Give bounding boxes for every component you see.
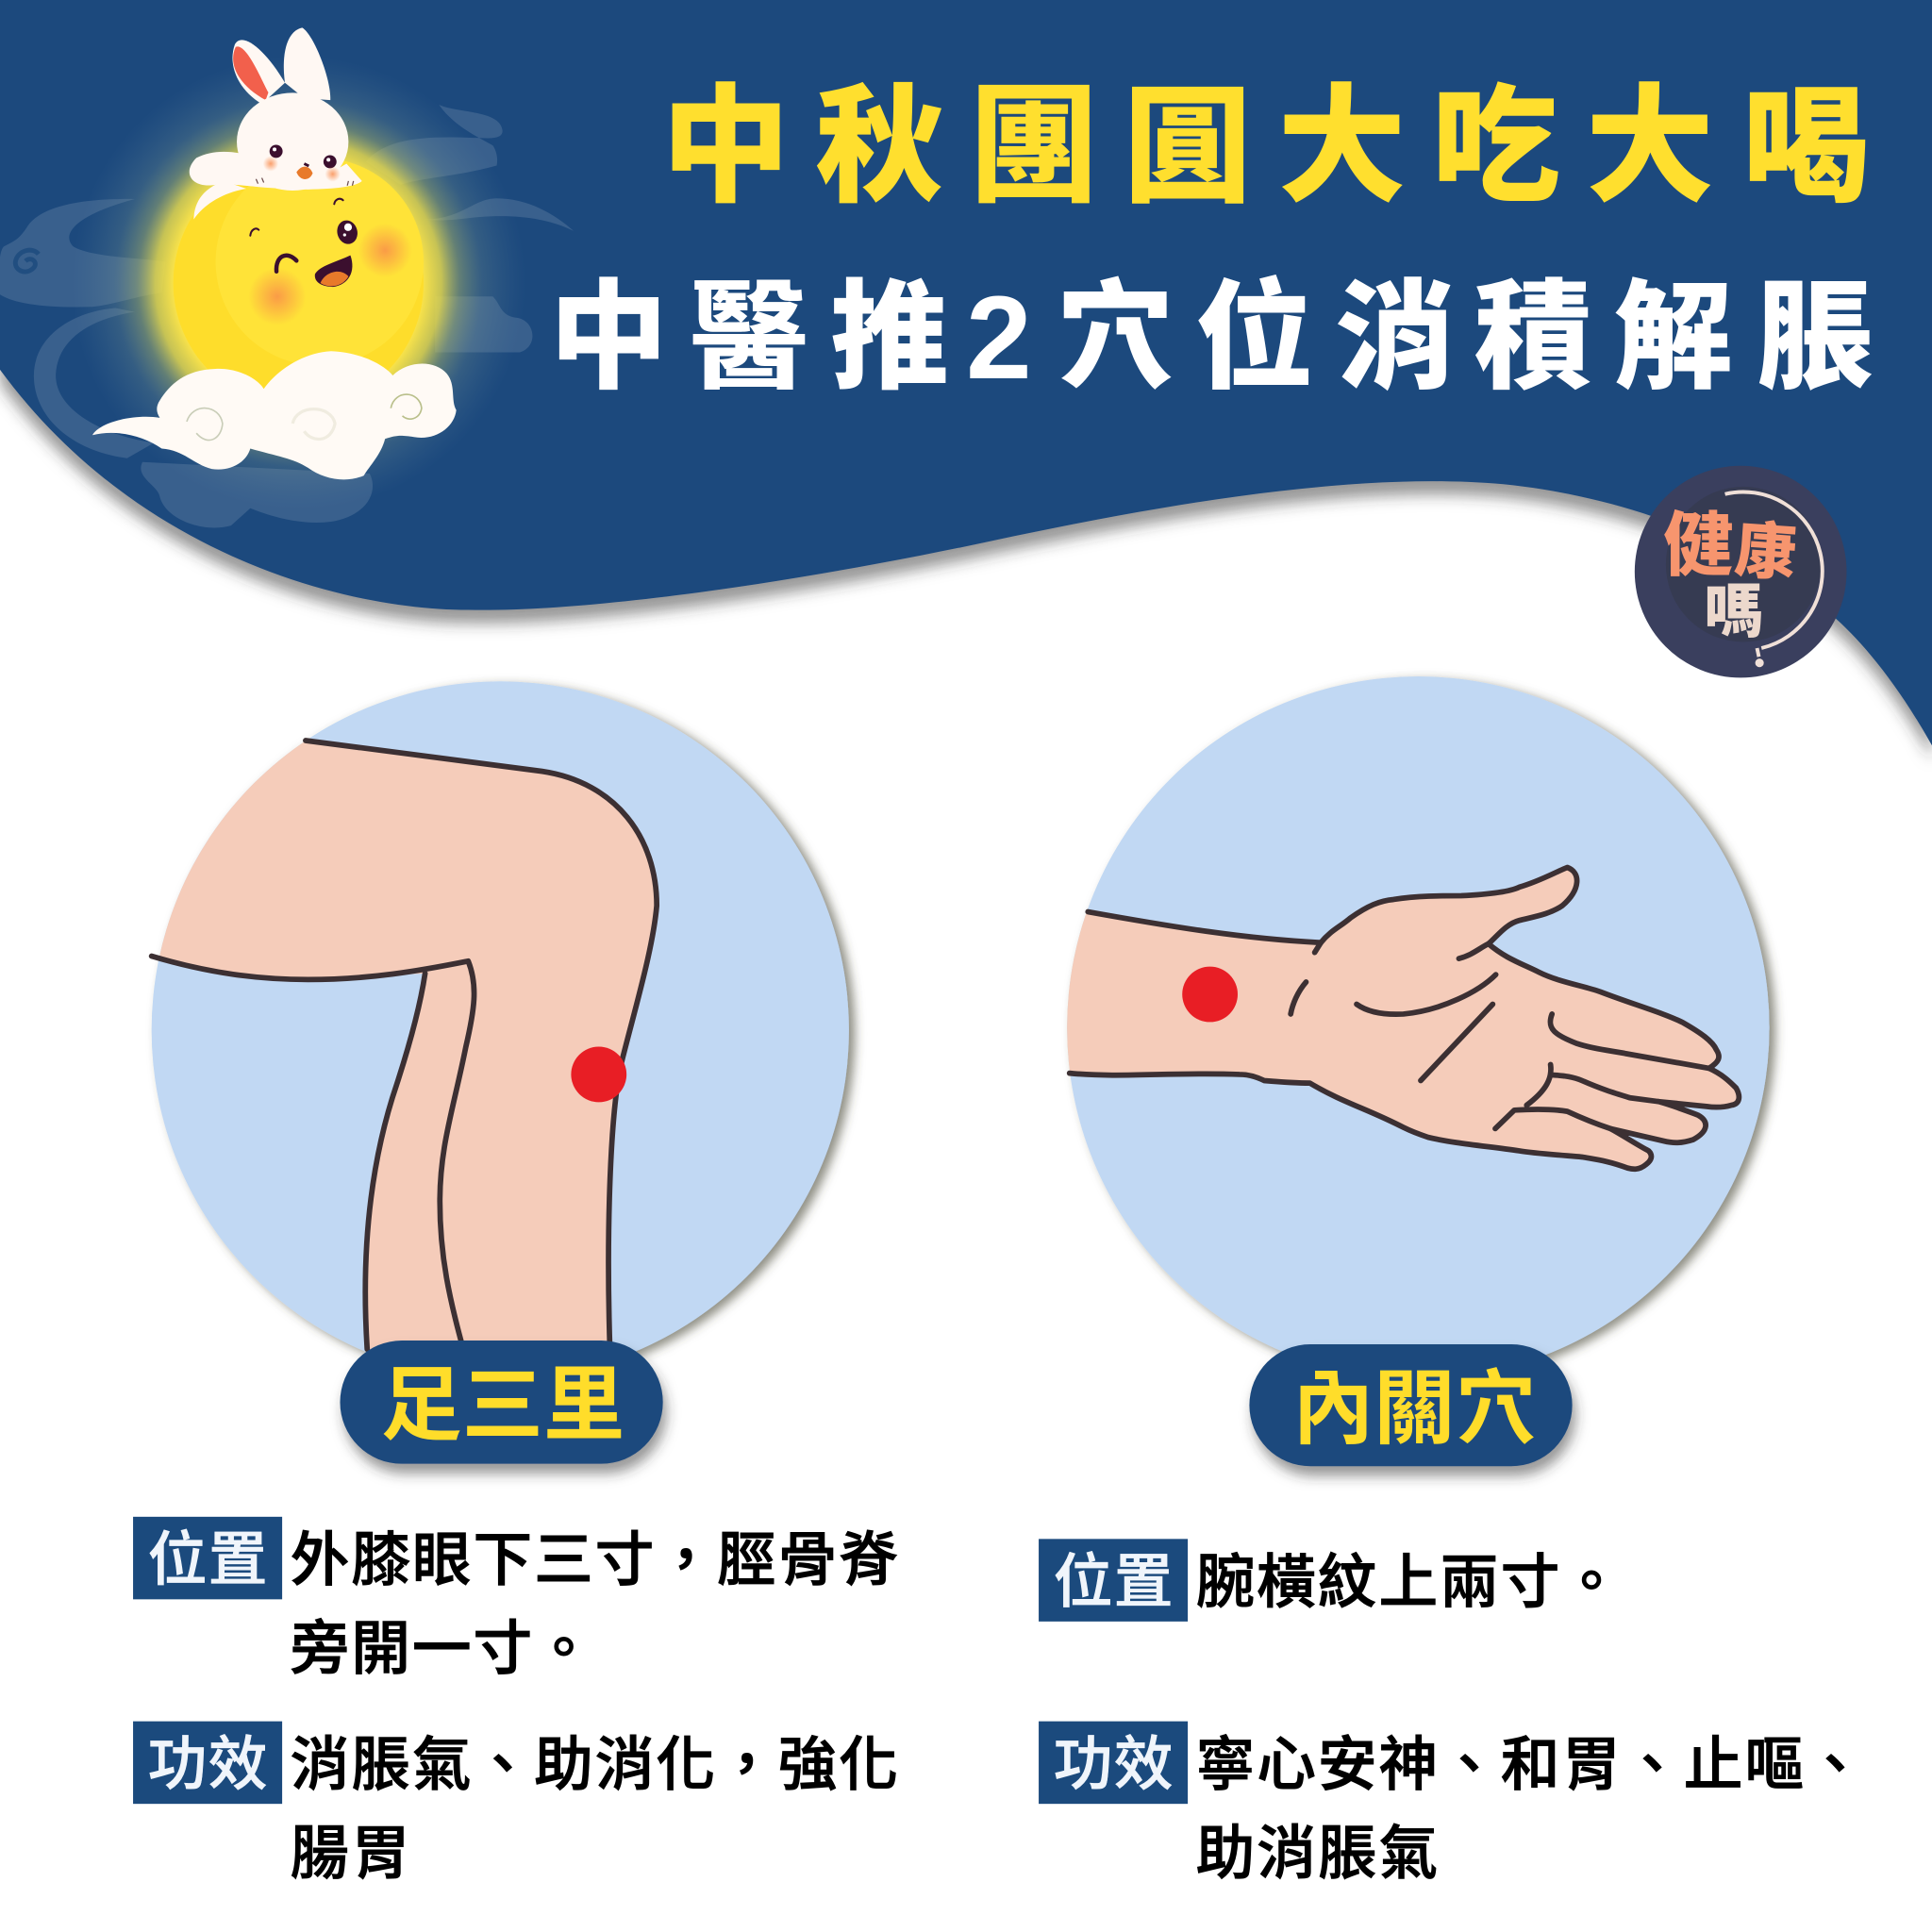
panel: 足三里 <box>124 681 900 1887</box>
blue circle <box>1067 676 1770 1379</box>
hand illustration <box>1059 868 1739 1169</box>
panel: 內關穴 <box>1039 676 1867 1887</box>
badge: 健康嗎 logo <box>1635 466 1846 677</box>
white cloud <box>92 351 457 479</box>
location <box>133 1517 900 1682</box>
effects: 功效 <box>148 1731 269 1797</box>
location: 腕橫紋上兩寸。 <box>1196 1550 1623 1616</box>
location: 外膝眼下三寸，脛骨脊 <box>291 1527 900 1593</box>
name pill <box>1249 1344 1573 1466</box>
leg illustration <box>124 740 657 1349</box>
acupoint dot <box>1182 967 1238 1022</box>
decorative mist clouds <box>0 105 574 527</box>
effects <box>133 1722 900 1887</box>
name pill <box>340 1341 663 1464</box>
location: 位置 <box>148 1526 269 1592</box>
illustration: moon with rabbit on cloud <box>0 27 574 527</box>
banner background <box>0 0 1932 745</box>
name pill: 足三里 <box>381 1360 625 1451</box>
name pill: 內關穴 <box>1292 1364 1537 1455</box>
badge: 健康嗎 logo: 康 <box>1732 515 1799 589</box>
acupoint dot <box>571 1047 626 1102</box>
badge: 健康嗎 logo: 嗎 <box>1704 579 1763 645</box>
effects: 消脹氣、助消化，強化 <box>291 1732 900 1798</box>
rabbit <box>190 27 362 220</box>
effects: 助消脹氣 <box>1196 1821 1440 1887</box>
location: 位置 <box>1054 1549 1174 1615</box>
location <box>1039 1539 1623 1622</box>
effects: 功效 <box>1054 1731 1174 1797</box>
effects: 寧心安神、和胃、止嘔、 <box>1196 1732 1867 1798</box>
badge: 健康嗎 logo: 健 <box>1663 506 1734 584</box>
location: 旁開一寸。 <box>291 1616 595 1682</box>
title line 2: 中醫推2穴位消積解脹 <box>550 271 1874 404</box>
moon face <box>248 199 412 325</box>
effects <box>1039 1722 1867 1887</box>
title line 1: 中秋團圓大吃大喝 <box>661 75 1871 218</box>
blue circle <box>152 681 849 1379</box>
effects: 腸胃 <box>291 1821 412 1887</box>
